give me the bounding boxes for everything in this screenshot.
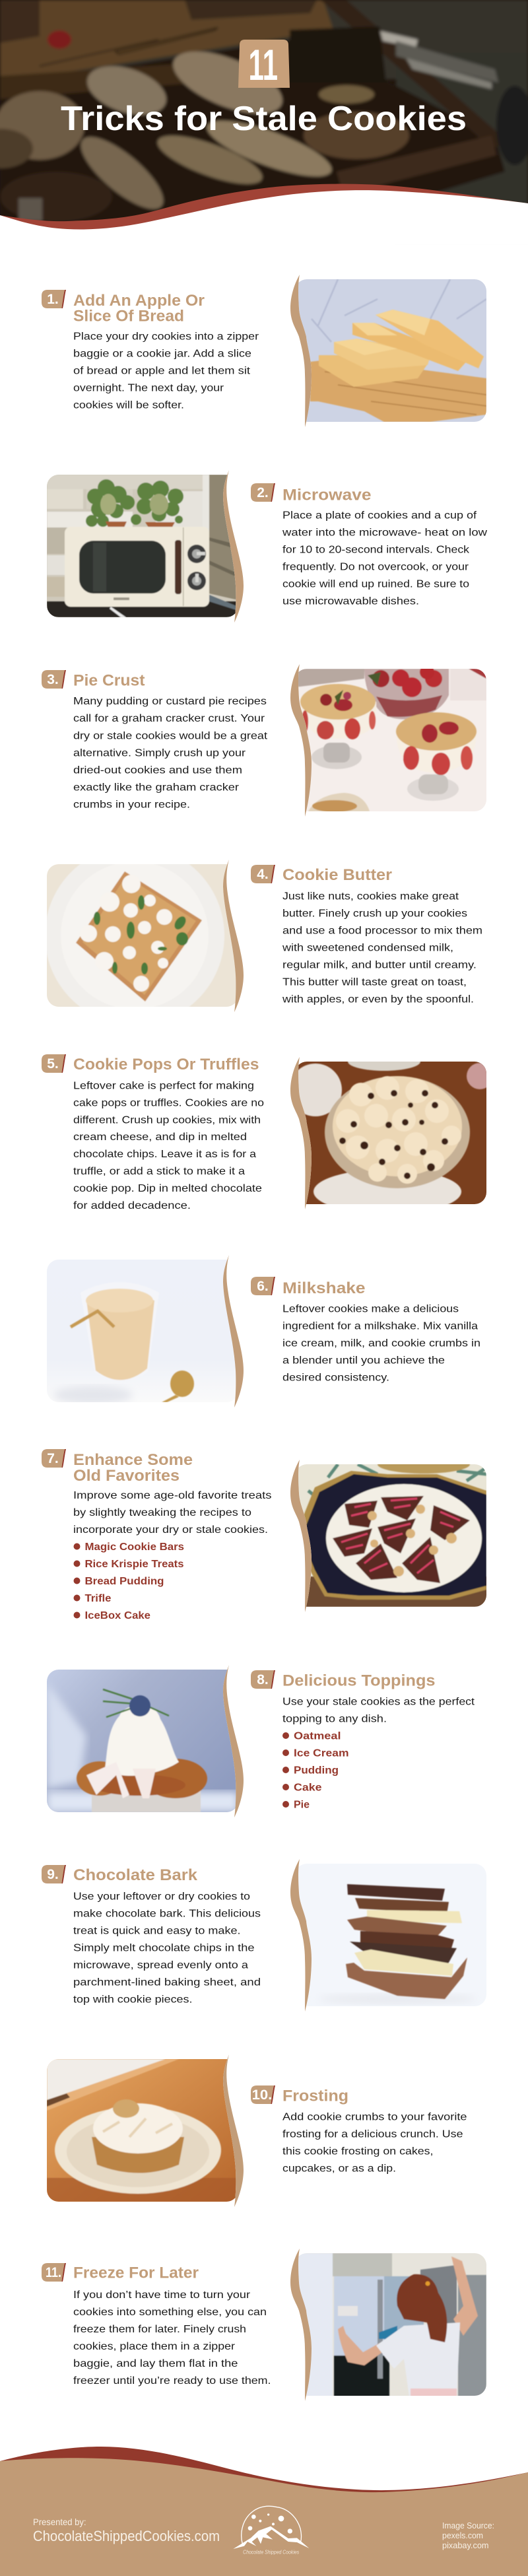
body text: freezer until you’re ready to use them.: [73, 2375, 271, 2387]
body text: Improve some age-old favorite treats: [73, 1490, 272, 1501]
heading: [73, 1451, 193, 1485]
body text: use microwavable dishes.: [282, 595, 419, 607]
body text: [73, 331, 259, 411]
heading: Enhance Some: [73, 1451, 193, 1469]
heading: Milkshake: [282, 1279, 366, 1297]
bullet list: Trifle: [84, 1593, 112, 1604]
bullet list: Rice Krispie Treats: [84, 1559, 183, 1570]
image source: pexels.com: [442, 2530, 483, 2540]
body text: a blender until you achieve the: [282, 1355, 445, 1367]
photo: cookies in a glass dish: [298, 1062, 486, 1204]
presented by: [33, 2517, 220, 2544]
body text: [73, 1490, 272, 1536]
body text: Leftover cake is perfect for making: [73, 1080, 254, 1092]
bullet list: Magic Cookie Bars: [84, 1542, 184, 1553]
image source: [442, 2521, 494, 2550]
body text: frequently. Do not overcook, or your: [282, 561, 469, 573]
body text: [282, 2111, 467, 2175]
body text: Simply melt chocolate chips in the: [73, 1942, 255, 1954]
presented by: ChocolateShippedCookies.com: [33, 2528, 220, 2544]
bullet list: Bread Pudding: [84, 1576, 164, 1587]
swoosh: [290, 1057, 312, 1209]
badge: 2: [251, 483, 275, 502]
body text: top with cookie pieces.: [73, 1994, 193, 2006]
body text: different. Crush up cookies, mix with: [73, 1114, 261, 1126]
logo: cookie and mountains: [233, 2506, 309, 2555]
body text: dry or stale cookies would be a great: [73, 730, 268, 742]
body text: cookies into something else, you can: [73, 2307, 267, 2318]
body text: [282, 1303, 480, 1384]
swoosh: [223, 860, 244, 1012]
body text: exactly like the graham cracker: [73, 782, 240, 794]
swoosh: [290, 1859, 312, 2012]
body text: call for a graham cracker crust. Your: [73, 713, 265, 724]
body text: treat is quick and easy to make.: [73, 1925, 240, 1937]
heading: Microwave: [282, 486, 371, 504]
body text: this cookie frosting on cakes,: [282, 2146, 433, 2157]
swoosh: [290, 2249, 312, 2401]
body text: parchment-lined baking sheet, and: [73, 1977, 261, 1988]
bullet list: Cake: [294, 1782, 322, 1793]
photo: woman at an open freezer: [295, 2253, 490, 2396]
footer background: tan: [0, 2458, 528, 2576]
body text: for added decadence.: [73, 1200, 191, 1211]
badge: 5: 5.: [47, 1056, 59, 1071]
body text: alternative. Simply crush up your: [73, 747, 246, 759]
body text: incorporate your dry or stale cookies.: [73, 1524, 268, 1536]
photo: meringue tart on a plate: [47, 2059, 242, 2202]
panel: step 4 cookie butter: [47, 860, 482, 1012]
heading: Pie Crust: [73, 672, 145, 689]
photo: cookie with cream and blueberry: [47, 1670, 242, 1812]
body text: [282, 1697, 475, 1724]
swoosh: [290, 1460, 312, 1612]
body text: baggie, and lay them flat in the: [73, 2358, 238, 2369]
badge: 5: [42, 1054, 66, 1073]
badge: 11: 11.: [46, 2265, 61, 2280]
swoosh: [290, 275, 312, 427]
badge: 10: 10.: [252, 2087, 272, 2103]
badge: 7: [42, 1449, 66, 1468]
body text: cupcakes, or as a dip.: [282, 2163, 396, 2175]
body text: freeze them for later. Finely crush: [73, 2324, 246, 2335]
photo: microwave: [47, 475, 242, 617]
photo: stack of chocolate: [295, 1864, 490, 2006]
photo: milkshake in a glass: [47, 1260, 242, 1404]
photo: strawberry desserts: [295, 665, 490, 812]
badge: 8: [251, 1670, 275, 1689]
body text: ingredient for a milkshake. Mix vanilla: [282, 1320, 478, 1332]
body text: cookie pop. Dip in melted chocolate: [73, 1183, 262, 1194]
photo: bread on a board: [295, 279, 490, 422]
heading: Add An Apple Or: [73, 292, 205, 310]
body text: for 10 to 20-second intervals. Check: [282, 544, 470, 556]
bullet list: Pudding: [294, 1765, 339, 1776]
body text: dried-out cookies and use them: [73, 764, 242, 776]
body text: desired consistency.: [282, 1372, 389, 1384]
badge: 6: 6.: [257, 1279, 269, 1294]
wave: red band: [0, 184, 528, 241]
heading: Cookie Pops Or Truffles: [73, 1056, 259, 1073]
badge: 4: 4.: [257, 867, 269, 882]
body text: cake pops or truffles. Cookies are no: [73, 1097, 264, 1109]
body text: [282, 510, 488, 607]
body text: topping to any dish.: [282, 1714, 387, 1724]
badge: 7: 7.: [47, 1451, 59, 1466]
badge: 9: 9.: [47, 1867, 59, 1882]
body text: cream cheese, and dip in melted: [73, 1132, 247, 1143]
photo: toast with cookie butter: [47, 864, 236, 1007]
body text: ice cream, milk, and cookie crumbs in: [282, 1338, 480, 1349]
header banner: [0, 0, 528, 244]
badge: 3: [42, 670, 66, 689]
badge: 6: [251, 1277, 275, 1295]
bullet list: Ice Cream: [294, 1748, 348, 1759]
badge: 1: [42, 290, 66, 308]
panel: step 8 delicious toppings: [47, 1665, 475, 1817]
badge: 8: 8.: [257, 1672, 269, 1687]
panel: step 1 apple or bread: [42, 275, 490, 427]
body text: by slightly tweaking the recipes to: [73, 1507, 251, 1518]
bullet list: IceBox Cake: [84, 1610, 150, 1621]
bullet list: Oatmeal: [294, 1731, 341, 1742]
hero photo: cookies on a tray: [0, 0, 528, 241]
panel: step 2 microwave: [47, 470, 488, 623]
panel: step 9 chocolate bark: [42, 1859, 490, 2012]
heading: Delicious Toppings: [282, 1672, 436, 1690]
badge: 4: [251, 865, 275, 883]
body text: Leftover cookies make a delicious: [282, 1303, 459, 1315]
body text: microwave, spread evenly onto a: [73, 1959, 248, 1971]
body text: [73, 1080, 264, 1211]
panel: step 5 cookie pops or truffles: [42, 1052, 493, 1214]
body text: cookies will be softer.: [73, 400, 184, 411]
body text: frosting for a delicious crunch. Use: [282, 2128, 463, 2140]
heading: Chocolate Bark: [73, 1866, 198, 1884]
badge: 2: 2.: [257, 485, 269, 500]
body text: make chocolate bark. This delicious: [73, 1908, 261, 1920]
body text: Use your stale cookies as the perfect: [282, 1697, 475, 1707]
body text: [282, 891, 482, 1005]
body text: [73, 696, 268, 811]
badge: 9: [42, 1865, 66, 1883]
body text: of bread or apple and let them sit: [73, 366, 251, 376]
badge: number 11: 11: [248, 40, 278, 89]
body text: with apples, or even by the spoonful.: [282, 994, 474, 1005]
heading: Slice Of Bread: [73, 308, 184, 325]
footer: [0, 2447, 528, 2576]
body text: [73, 1891, 261, 2006]
body text: Place your dry cookies into a zipper: [73, 331, 259, 342]
bullet list: Pie: [294, 1800, 310, 1810]
panel: step 11 freeze for later: [42, 2249, 490, 2401]
footer wave: red: [0, 2447, 528, 2576]
badge: 10: [251, 2085, 275, 2104]
swoosh: [290, 664, 312, 817]
panel: step 3 pie crust: [42, 664, 490, 817]
heading: Frosting: [282, 2087, 348, 2105]
swoosh: [223, 1255, 244, 1407]
badge: 1: 1.: [47, 292, 59, 307]
body text: Just like nuts, cookies make great: [282, 891, 459, 902]
heading: [73, 292, 205, 325]
image source: pixabay.com: [442, 2540, 488, 2550]
wave: white edge: [0, 190, 528, 244]
body text: This butter will taste great on toast,: [282, 977, 467, 988]
body text: If you don’t have time to turn your: [73, 2289, 251, 2301]
body text: cookie will end up ruined. Be sure to: [282, 578, 469, 590]
body text: Use your leftover or dry cookies to: [73, 1891, 250, 1903]
heading: Cookie Butter: [282, 866, 392, 884]
body text: baggie or a cookie jar. Add a slice: [73, 349, 251, 359]
body text: Place a plate of cookies and a cup of: [282, 510, 477, 522]
body text: overnight. The next day, your: [73, 383, 224, 393]
bullet list: [282, 1731, 348, 1810]
presented by: Presented by:: [33, 2517, 86, 2527]
panel: step 7 enhance some old favorites: [42, 1449, 490, 1621]
body text: chocolate chips. Leave it as is for a: [73, 1149, 256, 1160]
image source: Image Source:: [442, 2521, 494, 2530]
body text: and use a food processor to mix them: [282, 926, 482, 936]
body text: regular milk, and butter until creamy.: [282, 960, 477, 970]
body text: cookies, place them in a zipper: [73, 2341, 236, 2352]
panel: step 6 milkshake: [47, 1255, 480, 1407]
bullet list: [74, 1542, 184, 1621]
heading: Freeze For Later: [73, 2264, 199, 2282]
badge: 11: [42, 2263, 66, 2282]
logo: cookie and mountains: Chocolate Shipped Cookies: [243, 2549, 299, 2555]
body text: water into the microwave- heat on low: [282, 527, 488, 539]
heading: Old Favorites: [73, 1467, 180, 1485]
body text: truffle, or add a stick to make it a: [73, 1166, 245, 1177]
badge: 3: 3.: [47, 672, 59, 687]
body text: with sweetened condensed milk,: [282, 943, 453, 953]
swoosh: [223, 1665, 244, 1817]
body text: [73, 2289, 271, 2387]
body text: butter. Finely crush up your cookies: [282, 908, 467, 919]
swoosh: [223, 470, 244, 623]
panel: step 10 frosting: [47, 2054, 467, 2207]
swoosh: [223, 2054, 244, 2207]
body text: crumbs in your recipe.: [73, 799, 190, 811]
photo: brownie trees on a plate: [295, 1455, 490, 1607]
body text: Add cookie crumbs to your favorite: [282, 2111, 467, 2123]
title: Tricks for Stale Cookies: [61, 100, 467, 138]
body text: Many pudding or custard pie recipes: [73, 696, 267, 707]
